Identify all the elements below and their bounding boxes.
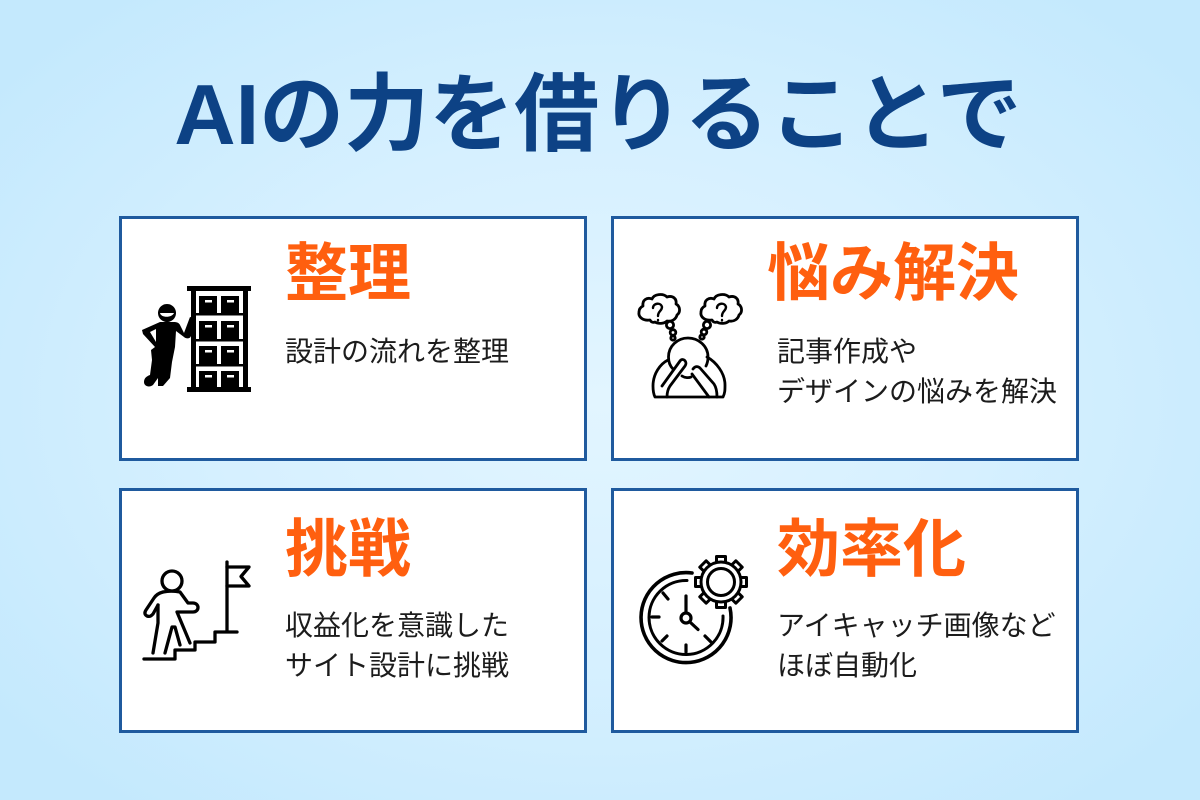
heading: efficiency: 効率化 [777, 515, 966, 585]
icon: worried person with question clouds [639, 295, 742, 397]
text: challenge: サイト設計に挑戦 [285, 650, 509, 681]
icon: person climbing stairs to flag [144, 562, 249, 659]
panel: efficiency [611, 488, 1079, 733]
text: organize: 設計の流れを整理 [285, 336, 509, 367]
text: efficiency [777, 610, 1056, 681]
text: efficiency: アイキャッチ画像など [777, 610, 1056, 641]
text: solve worries: デザインの悩みを解決 [777, 376, 1057, 407]
text: challenge [285, 610, 509, 681]
text: challenge: 収益化を意識した [285, 610, 509, 641]
panel: organize [119, 216, 587, 461]
heading: organize: 整理 [285, 239, 411, 309]
text: efficiency: ほぼ自動化 [777, 650, 917, 681]
icon: clock with gear [641, 556, 746, 663]
panel: solve worries [611, 216, 1079, 461]
heading: solve worries: 悩み解決 [767, 239, 1019, 309]
text: solve worries [777, 336, 1057, 407]
text: solve worries: 記事作成や [777, 336, 917, 367]
title: AIの力を借りることで [174, 68, 1022, 163]
icon: person leaning on shelves [142, 286, 251, 392]
heading: challenge: 挑戦 [285, 515, 411, 585]
panel: challenge [119, 488, 587, 733]
